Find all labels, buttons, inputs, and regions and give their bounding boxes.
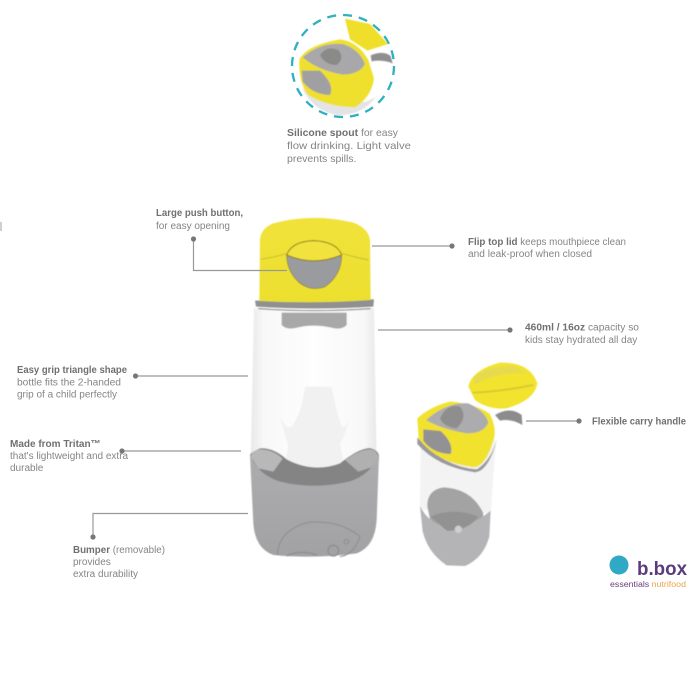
- logo icon: [610, 556, 628, 574]
- small bumper: [420, 506, 491, 566]
- logo: b.box: [610, 556, 687, 589]
- callout: bumper: [73, 514, 248, 580]
- open lid: [468, 363, 537, 409]
- inner collar: [282, 313, 347, 329]
- callout: large push button: [156, 208, 287, 270]
- callout: made from Tritan: that's lightweight and extra: [10, 451, 129, 462]
- callout: flip top lid: and leak-proof when closed: [468, 249, 592, 260]
- text: silicone spout: Silicone spout for easy: [287, 127, 399, 139]
- main bottle: [250, 218, 379, 557]
- callout: bumper: Bumper (removable): [73, 545, 165, 556]
- callout: capacity: 460ml / 16oz capacity so: [525, 322, 639, 334]
- push button: [287, 255, 342, 289]
- callout: bumper: provides: [73, 557, 111, 568]
- logo tagline: essentials nutrifood: [610, 580, 686, 589]
- callout: made from Tritan: durable: [10, 463, 44, 474]
- inner silhouette: [280, 387, 350, 470]
- callout: large push button: Large push button,: [156, 208, 243, 219]
- gray ring: [255, 299, 374, 309]
- text: silicone spout: [287, 127, 411, 165]
- small bottle with open lid: [417, 363, 537, 566]
- text: silicone spout: prevents spills.: [287, 153, 356, 165]
- small body: [420, 440, 496, 513]
- handle: [495, 410, 522, 425]
- callout: made from Tritan: [10, 439, 241, 474]
- callout: flexible carry handle: [526, 416, 686, 428]
- callout: large push button: for easy opening: [156, 221, 230, 232]
- small lid base: [417, 402, 495, 467]
- edge mark: [0, 222, 2, 231]
- logo wordmark: b.box: [637, 559, 687, 580]
- callout: made from Tritan: Made from Tritan™: [10, 439, 101, 450]
- callout: flip top lid: [372, 237, 626, 260]
- callout: flexible carry handle: Flexible carry handle: [592, 416, 686, 428]
- callout: bumper: extra durability: [73, 569, 138, 580]
- dashed teal circle: [292, 15, 394, 117]
- flip lid: [259, 218, 371, 302]
- text: silicone spout: flow drinking. Light valve: [287, 140, 411, 152]
- callout: flip top lid: Flip top lid keeps mouthpiece clean: [468, 237, 626, 248]
- callout: easy grip: bottle fits the 2-handed: [17, 378, 121, 388]
- bumper: [250, 448, 379, 557]
- detail image: silicone spout in dashed circle: [292, 15, 394, 117]
- callout: easy grip: Easy grip triangle shape: [17, 365, 127, 376]
- small gray ring: [417, 437, 497, 472]
- callout: capacity: kids stay hydrated all day: [525, 335, 637, 346]
- callout: easy grip: grip of a child perfectly: [17, 390, 117, 400]
- bottle body: [251, 308, 377, 463]
- callout: easy grip: [17, 365, 248, 400]
- callout: capacity: [378, 322, 639, 346]
